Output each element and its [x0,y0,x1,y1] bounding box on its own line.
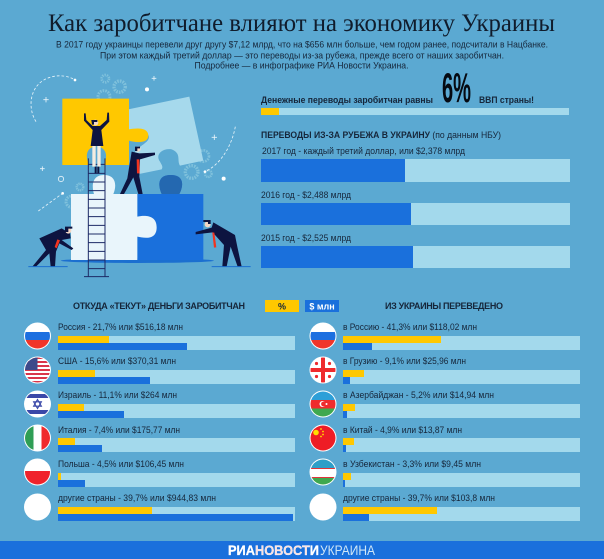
footer bar with logo: РИАНОВОСТИ [228,542,319,558]
row: USA: США - 15,6% или $370,31 млн [58,356,176,366]
stat: 6% of GDP [261,64,569,115]
row: Poland: Польша - 4,5% или $106,45 млн [58,459,184,469]
decorative dashes and sparkles [31,76,235,211]
footer bar with logo: УКРАИНА [320,542,376,558]
stat: 6% of GDP: ВВП страны! [479,95,534,105]
row: to Russia [310,322,580,350]
illustration: puzzle team [28,75,251,277]
heading: destinations: ИЗ УКРАИНЫ ПЕРЕВЕДЕНО [385,301,503,311]
chart: remittances to Ukraine: 2016 год - $2,488 млрд [261,190,352,200]
man pushing white piece [28,227,73,267]
footer bar with logo [0,541,604,559]
row: Israel [24,390,295,418]
ground shadow [61,258,214,263]
row: other destinations: другие страны - 39,7% или $103,8 млн [343,493,495,503]
chart: remittances to Ukraine [261,130,570,268]
row: to Azerbaijan: в Азербайджан - 5,2% или $14,94 млн [343,390,494,400]
legend: percent: % [278,302,286,312]
legend: percent [265,300,299,312]
row: Russia [24,322,295,350]
woman on ladder [84,113,109,173]
row: Italy: Италия - 7,4% или $175,77 млн [58,425,180,435]
row: to Georgia [310,356,580,384]
heading: sources: ОТКУДА «ТЕКУТ» ДЕНЬГИ ЗАРОБИТЧАН [73,301,245,311]
row: Italy [24,424,295,452]
yellow puzzle piece [62,99,148,165]
row: to Azerbaijan [310,390,580,418]
legend: million dollars [305,300,339,312]
row: to Uzbekistan [310,458,580,487]
stat: 6% of GDP: Денежные переводы заробитчан равны [261,95,433,105]
intro text [56,40,548,70]
light blue puzzle piece [125,97,203,174]
row: to China [310,424,580,452]
row: to Georgia: в Грузию - 9,1% или $25,96 млн [343,356,466,366]
man pushing blue piece [196,220,251,267]
chart: remittances to Ukraine: 2017 год - каждый третий доллар, или $2,378 млрд [262,146,466,156]
row: to China: в Китай - 4,9% или $13,87 млн [343,425,462,435]
row: Poland [24,458,295,487]
intro text: При этом каждый третий доллар — это переводы из-за рубежа, прежде всего от наших заробитчан. [100,50,504,60]
legend: million dollars: $ млн [309,302,335,312]
row: Russia: Россия - 21,7% или $516,18 млн [58,322,183,332]
title: Как заробитчане влияют на экономику Украины [48,8,555,37]
row: Israel: Израиль - 11,1% или $264 млн [58,390,177,400]
stat: 6% of GDP: 6% [442,64,471,111]
row: to Russia: в Россию - 41,3% или $118,02 млн [343,322,477,332]
row: other countries: другие страны - 39,7% или $944,83 млн [58,493,216,503]
intro text: Подробнее — в инфографике РИА Новости Украина. [194,60,408,70]
ladder [84,158,109,277]
row: to Uzbekistan: в Узбекистан - 3,3% или $9,45 млн [343,459,481,469]
row: other countries [24,493,295,521]
intro text: В 2017 году украинцы перевели друг другу $7,12 млрд, что на $656 млн больше, чем годом ранее, подсчитали в Нацбанке. [56,40,548,50]
row: other destinations [310,493,580,521]
row: USA [24,356,295,384]
decorative gears [66,75,212,207]
man pushing light piece [120,146,155,194]
white puzzle piece [71,175,157,260]
chart: remittances to Ukraine: ПЕРЕВОДЫ ИЗ-ЗА РУБЕЖА В УКРАИНУ (по данным НБУ) [261,130,501,140]
blue puzzle piece [137,175,203,260]
chart: remittances to Ukraine: 2015 год - $2,525 млрд [261,233,352,243]
